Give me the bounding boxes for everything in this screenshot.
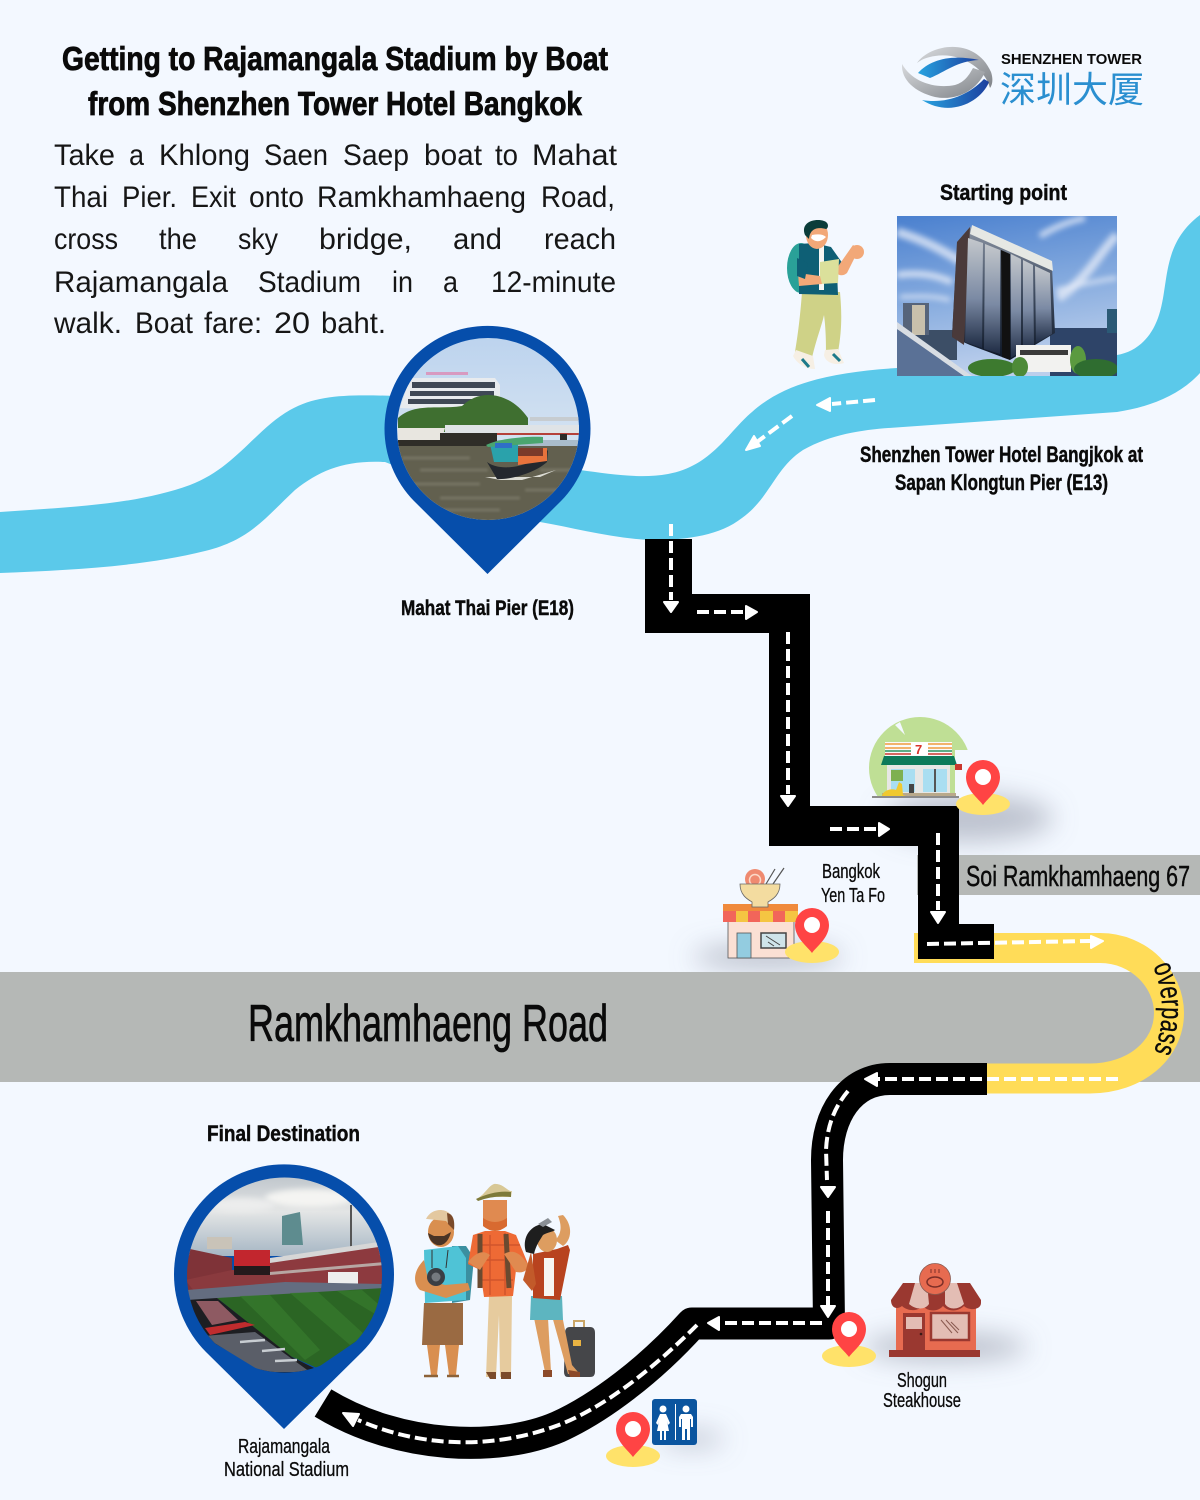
Ramkhamhaeng Road band xyxy=(0,972,1200,1082)
intro paragraph: onto xyxy=(249,181,304,214)
photo: Shenzhen Tower Hotel xyxy=(897,216,1118,379)
label: Shogun Steakhouse: Steakhouse xyxy=(883,1390,961,1412)
logo: Shenzhen Tower: SHENZHEN TOWER xyxy=(1001,52,1143,68)
intro paragraph: fare: xyxy=(204,307,262,340)
intro paragraph: Mahat xyxy=(532,139,618,172)
intro paragraph: Take xyxy=(54,139,115,172)
title: from Shenzhen Tower Hotel Bangkok xyxy=(88,85,583,122)
intro paragraph: Saen xyxy=(264,139,328,172)
intro paragraph: sky xyxy=(238,223,278,256)
pin marker: noodle shop xyxy=(785,908,839,963)
label: Mahat Thai Pier: Mahat Thai Pier (E18) xyxy=(401,597,574,620)
label: Shogun Steakhouse xyxy=(883,1370,961,1412)
location label: Sapan Klongtun Pier xyxy=(860,442,1144,495)
pin: Mahat Thai Pier xyxy=(384,326,590,574)
illustration: group of tourists xyxy=(415,1184,595,1379)
location label: Sapan Klongtun Pier: Sapan Klongtun Pier (E13) xyxy=(895,470,1108,495)
intro paragraph xyxy=(53,139,618,340)
intro paragraph: Exit xyxy=(191,181,237,214)
route direction arrows xyxy=(343,398,1118,1442)
walking route: black road, overpass to stadium xyxy=(323,1079,987,1443)
intro paragraph: in xyxy=(392,266,413,299)
logo: Shenzhen Tower: 深圳大厦 xyxy=(1000,61,1144,113)
map shadows beneath the landmarks xyxy=(660,794,1053,1447)
intro paragraph: 20 xyxy=(274,307,310,340)
overpass: yellow curved walkway xyxy=(914,933,1184,1094)
intro paragraph: 12-minute xyxy=(491,266,616,299)
photo: stadium interior xyxy=(185,1176,385,1375)
intro paragraph: reach xyxy=(544,223,616,256)
overpass: yellow curved walkway: overpass xyxy=(1154,963,1178,1055)
intro paragraph: to xyxy=(495,139,518,172)
river: Khlong Saen Saep xyxy=(0,215,1200,573)
label: Bangkok Yen Ta Fo: Yen Ta Fo xyxy=(821,884,885,907)
logo: Shenzhen Tower xyxy=(902,47,1144,113)
label: Bangkok Yen Ta Fo: Bangkok xyxy=(822,860,881,883)
icon: 7-Eleven store xyxy=(869,717,973,798)
intro paragraph: cross xyxy=(54,223,118,256)
intro paragraph: Ramkhamhaeng xyxy=(317,181,526,214)
label: Rajamangala National Stadium: National Stadium xyxy=(224,1458,349,1481)
label: Bangkok Yen Ta Fo xyxy=(821,860,885,907)
pin marker: 7-Eleven xyxy=(956,760,1010,815)
label: Rajamangala National Stadium: Rajamangala xyxy=(238,1435,330,1458)
pin marker: Shogun Steakhouse xyxy=(822,1312,876,1367)
intro paragraph: and xyxy=(453,223,502,256)
intro paragraph: Pier. xyxy=(122,181,177,214)
photo: express boat on the canal xyxy=(395,335,585,526)
icon: 7-Eleven store: 7 xyxy=(915,742,922,757)
icon: Shogun Steakhouse xyxy=(889,1264,981,1357)
intro paragraph: the xyxy=(159,223,197,256)
pin: Rajamangala National Stadium xyxy=(174,1164,394,1429)
label: Rajamangala National Stadium xyxy=(224,1435,349,1481)
intro paragraph: Road, xyxy=(541,181,615,214)
intro paragraph: Saep xyxy=(343,139,409,172)
title: Getting to Rajamangala Stadium by Boat xyxy=(62,40,608,77)
intro paragraph: Rajamangala xyxy=(54,266,228,299)
icon: restroom sign xyxy=(652,1399,697,1445)
intro paragraph: a xyxy=(129,139,144,172)
walking route: black road, pier to overpass xyxy=(645,539,994,959)
intro paragraph: Boat xyxy=(135,307,194,340)
label: Shogun Steakhouse: Shogun xyxy=(897,1370,947,1392)
pin marker: restroom xyxy=(606,1412,660,1467)
intro paragraph: boat xyxy=(424,139,483,172)
intro paragraph: Khlong xyxy=(159,139,250,172)
intro paragraph: baht. xyxy=(321,307,386,340)
starting point heading: Starting point xyxy=(940,180,1067,205)
intro paragraph: Thai xyxy=(54,181,108,214)
intro paragraph: walk. xyxy=(53,307,122,340)
intro paragraph: bridge, xyxy=(319,223,412,256)
intro paragraph: Stadium xyxy=(258,266,361,299)
intro paragraph: a xyxy=(443,266,458,299)
icon: noodle shop xyxy=(723,868,798,958)
Ramkhamhaeng Road band: Ramkhamhaeng Road xyxy=(248,995,608,1053)
title xyxy=(62,40,608,122)
Soi Ramkhamhaeng 67 band xyxy=(917,855,1200,895)
traveller with map xyxy=(787,220,864,369)
final destination heading: Final Destination xyxy=(207,1121,360,1146)
